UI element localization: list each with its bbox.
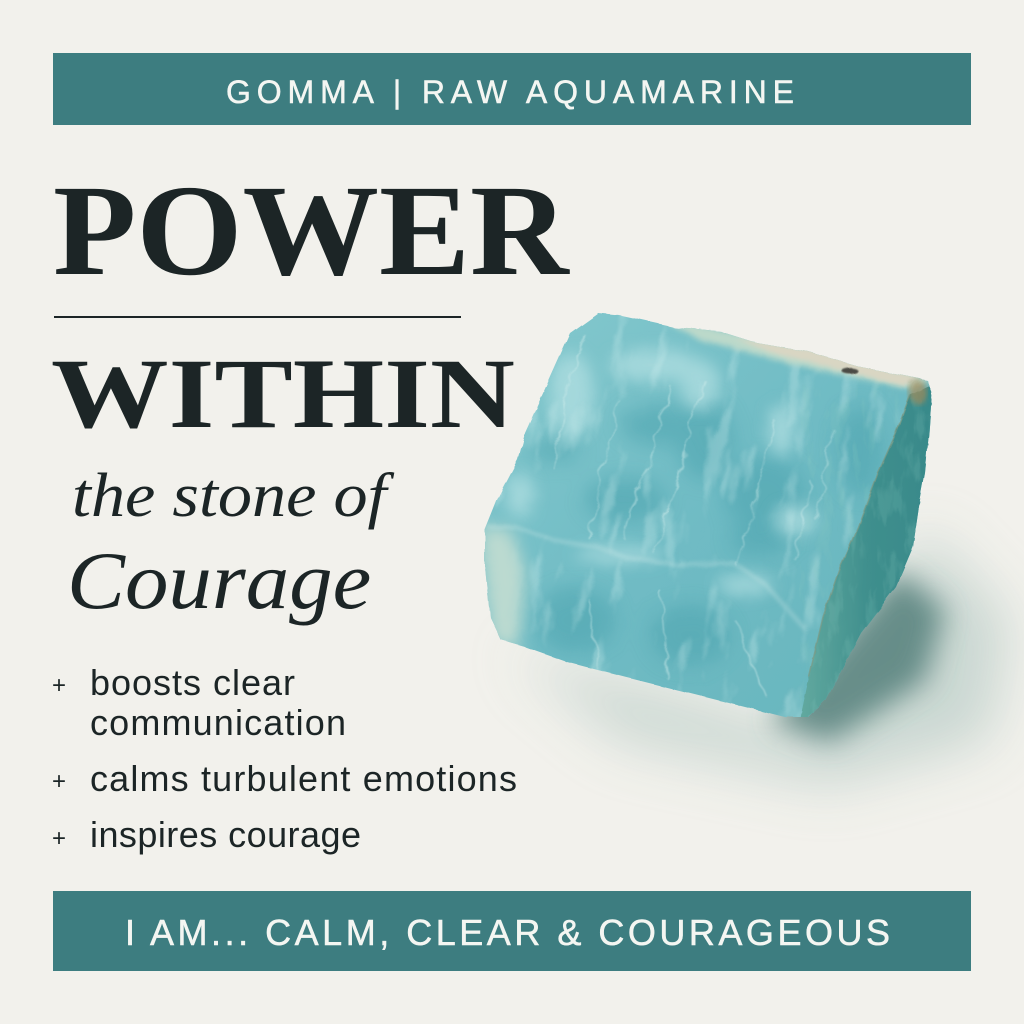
stone body xyxy=(484,313,932,717)
stone: light patches xyxy=(506,349,817,595)
benefit: communication: communication xyxy=(90,702,346,743)
bottom banner: I AM... CALM, CLEAR & COURAGEOUS xyxy=(125,912,890,953)
benefits list xyxy=(52,662,517,855)
stone: crease highlight xyxy=(487,527,806,630)
stone: darker patches xyxy=(530,400,882,665)
subtitle: the stone of: the stone of xyxy=(72,460,395,530)
top banner: GOMMA | RAW AQUAMARINE xyxy=(226,74,794,110)
benefit: communication: + xyxy=(52,672,66,699)
stone illustration xyxy=(484,313,1024,803)
title: power: POWER xyxy=(53,158,570,302)
title divider xyxy=(54,316,461,318)
stone: left pale face xyxy=(480,525,525,652)
benefit: emotions: calms turbulent emotions xyxy=(90,758,517,799)
stone: right face xyxy=(800,385,935,722)
subtitle: courage: Courage xyxy=(67,536,371,626)
stone: veins xyxy=(495,316,901,717)
benefit: communication xyxy=(52,662,346,743)
stone: edge line xyxy=(809,395,910,677)
benefit: communication: boosts clear xyxy=(90,662,295,703)
benefit: courage: + xyxy=(52,825,66,852)
top banner xyxy=(53,53,971,125)
title: within: WITHIN xyxy=(51,338,515,449)
benefit: emotions: + xyxy=(52,768,66,795)
stone: top rind xyxy=(670,327,928,392)
bottom banner xyxy=(53,891,971,971)
stone: hand veins xyxy=(555,335,835,695)
stone shadow xyxy=(510,530,1010,785)
benefit: courage: inspires courage xyxy=(90,814,361,855)
